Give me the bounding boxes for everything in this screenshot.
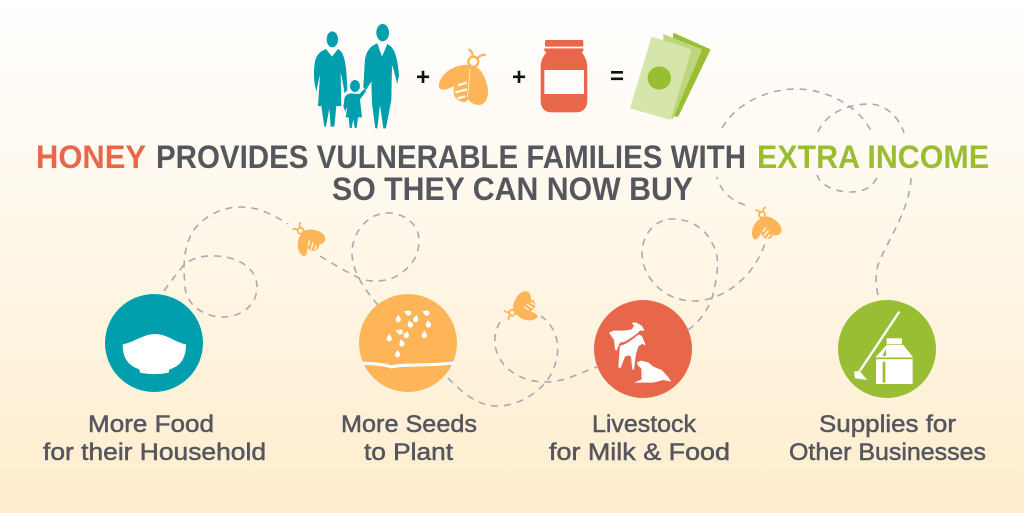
label: more food: More Food [88,411,214,438]
icon: family [314,24,399,128]
panel: more food [43,294,266,466]
panel: livestock [549,300,730,466]
label: supplies [789,411,986,466]
label: livestock: Livestock [592,411,697,438]
label: more food [43,411,266,466]
label: more seeds [341,411,477,466]
panel: more seeds [341,294,477,466]
label: supplies: Supplies for [819,411,956,438]
panel: supplies [789,300,986,466]
icon: bowl of food [105,294,203,392]
heading: PROVIDES VULNERABLE FAMILIES WITH [156,139,746,175]
equals sign: = [610,63,624,90]
icon: bee [439,49,488,105]
heading: HONEY [36,139,146,175]
icon: falling seeds [359,294,457,392]
equation: family + bee + jar = money [314,24,711,128]
icon: small bee 2 [501,289,545,333]
heading: SO THEY CAN NOW BUY [332,171,693,207]
plus sign: + [512,64,526,91]
label: supplies: Other Businesses [789,439,986,466]
label: more seeds: More Seeds [341,411,477,438]
dashed bee flight paths [164,89,911,406]
icon: small bee 1 [284,219,328,262]
icon: goats [594,300,692,398]
icon: honey jar [541,40,587,112]
label: livestock [549,411,730,466]
icon: hoe and jug [838,300,936,398]
heading: EXTRA INCOME [757,139,989,175]
label: livestock: for Milk & Food [549,439,730,466]
icon: money [630,33,711,120]
heading [36,139,989,207]
label: more seeds: to Plant [364,439,453,466]
plus sign: + [416,64,430,91]
icon: small bee 3 [741,204,784,248]
label: more food: for their Household [43,439,266,466]
